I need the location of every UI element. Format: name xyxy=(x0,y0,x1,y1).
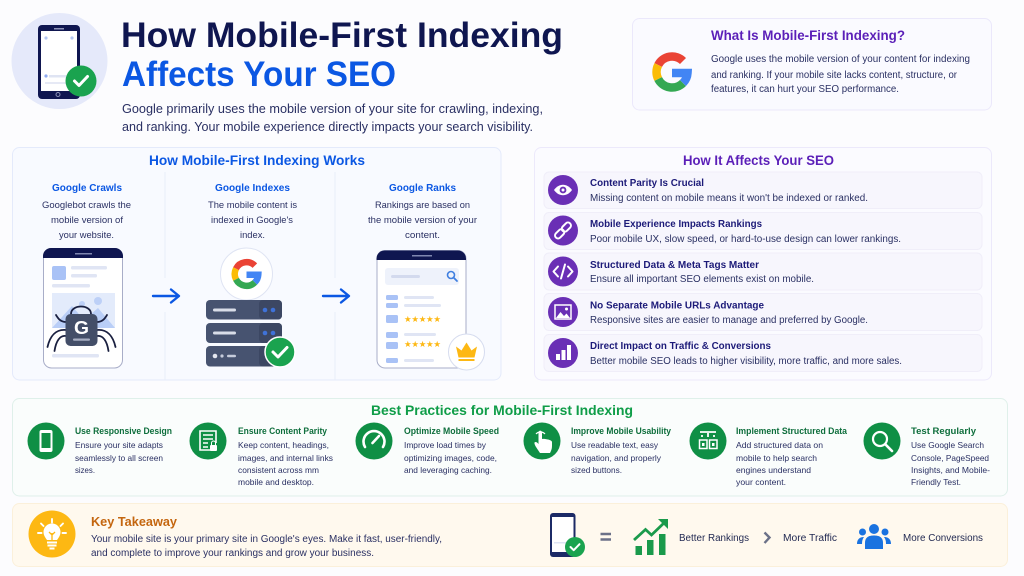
practice: test regularly: Console, PageSpeed xyxy=(911,453,989,463)
step: google crawls: your website. xyxy=(59,230,114,241)
icon: google G xyxy=(657,56,688,88)
label: more traffic: More Traffic xyxy=(783,533,837,544)
practice: responsive design: seamlessly to all screen xyxy=(75,453,163,463)
row: mobile experience xyxy=(544,212,982,250)
step: google indexes: index. xyxy=(240,230,265,241)
icon: image xyxy=(548,297,578,327)
description: features, it can hurt your SEO performance. xyxy=(711,84,899,95)
row: direct impact: Direct Impact on Traffic & Conversions xyxy=(590,341,771,352)
step: google crawls: Googlebot crawls the xyxy=(42,200,131,211)
illustration: phone with search rankings: ★★★★★ xyxy=(404,340,441,350)
chevron xyxy=(764,532,770,543)
panel: how it affects your seo xyxy=(534,148,992,380)
takeaway text: Your mobile site is your primary site in Google's eyes. Make it fast, user-friendly, xyxy=(91,534,442,545)
practice: mobile speed: optimizing images, code, xyxy=(404,453,497,463)
practice: content parity: consistent across mm xyxy=(238,465,319,475)
heading: How Mobile-First Indexing Works xyxy=(149,152,365,168)
step: google ranks: the mobile version of your xyxy=(368,215,477,226)
row: no separate urls: Responsive sites are easier to manage and preferred by Google. xyxy=(590,315,868,326)
icon: phone with check badge xyxy=(12,13,108,109)
row: no separate urls xyxy=(544,294,982,330)
practice: structured data: engines understand xyxy=(736,465,811,475)
icon: growth chart xyxy=(634,519,668,555)
practice: mobile speed xyxy=(356,422,499,475)
practice: mobile speed: and leveraging caching. xyxy=(404,465,492,475)
heading: Best Practices for Mobile-First Indexing xyxy=(371,402,633,418)
heading: How It Affects Your SEO xyxy=(683,152,834,168)
practice: mobile usability: Improve Mobile Usability xyxy=(571,426,671,436)
icon: link xyxy=(548,216,578,246)
icon: code xyxy=(548,256,578,286)
icon: eye xyxy=(548,175,578,205)
step: google crawls: mobile version of xyxy=(51,215,123,226)
step: google ranks: Google Ranks xyxy=(389,182,456,194)
takeaway text: and complete to improve your rankings and grow your business. xyxy=(91,548,374,559)
description: and ranking. If your mobile site lacks content, structure, or xyxy=(711,70,958,81)
step: google indexes xyxy=(206,182,297,367)
row: content parity xyxy=(544,172,982,208)
label: better rankings: Better Rankings xyxy=(679,533,749,544)
row: mobile experience: Mobile Experience Impacts Rankings xyxy=(590,219,762,230)
intro text xyxy=(122,102,543,134)
practice: content parity: Ensure Content Parity xyxy=(238,426,327,436)
practice: content parity xyxy=(190,422,333,487)
illustration: google server stack xyxy=(206,248,295,367)
step: google crawls: Google Crawls xyxy=(52,182,122,194)
practice: structured data: mobile to help search xyxy=(736,453,817,463)
practice: mobile usability: navigation, and properly xyxy=(571,453,662,463)
practice: test regularly xyxy=(864,422,990,487)
intro text: and ranking. Your mobile experience directly impacts your search visibility. xyxy=(122,120,533,134)
icon: phone xyxy=(28,422,64,460)
step: google indexes: The mobile content is xyxy=(208,200,297,211)
panel: best practices xyxy=(12,398,1008,496)
practice: responsive design xyxy=(28,422,172,475)
practice: test regularly: Friendly Test. xyxy=(911,477,961,487)
illustration: phone with crawler spider xyxy=(43,248,123,368)
row: structured data xyxy=(544,253,982,290)
row: mobile experience: Poor mobile UX, slow speed, or hard-to-use design can lower rankings. xyxy=(590,234,901,245)
description xyxy=(711,54,970,95)
step: google indexes: indexed in Google's xyxy=(211,215,293,226)
practice: structured data xyxy=(690,422,848,487)
practice: test regularly: Test Regularly xyxy=(911,426,976,436)
practice: structured data: Add structured data on xyxy=(736,440,823,450)
illustration: phone with search rankings: ★★★★★ xyxy=(404,315,441,325)
step: google indexes: Google Indexes xyxy=(215,182,290,194)
practice: mobile usability: sized buttons. xyxy=(571,465,622,475)
icon: bar chart xyxy=(548,338,578,368)
label: more conversions: More Conversions xyxy=(903,533,983,544)
title xyxy=(121,15,563,94)
practice: content parity: mobile and desktop. xyxy=(238,477,314,487)
icon: lightbulb xyxy=(28,510,76,558)
practice: mobile speed: Optimize Mobile Speed xyxy=(404,426,499,436)
step: google ranks xyxy=(368,182,484,370)
row: structured data: Structured Data & Meta Tags Matter xyxy=(590,260,759,271)
icon: structured blocks xyxy=(690,422,726,460)
row: content parity: Content Parity Is Crucial xyxy=(590,178,704,189)
row: content parity: Missing content on mobile means it won't be indexed or ranked. xyxy=(590,193,868,204)
panel: key takeaway xyxy=(12,504,1008,566)
practice: content parity: Keep content, headings, xyxy=(238,440,329,450)
takeaway text xyxy=(91,534,442,559)
heading: What Is Mobile-First Indexing? xyxy=(711,28,905,43)
step: google ranks: content. xyxy=(405,230,440,241)
icon: magnifier xyxy=(864,422,900,460)
icon: speed gauge xyxy=(356,422,392,460)
arrow: index to rank xyxy=(323,290,349,302)
practice: mobile usability: Use readable text, easy xyxy=(571,440,659,450)
intro text: Google primarily uses the mobile version of your site for crawling, indexing, xyxy=(122,102,543,116)
icon: content page xyxy=(190,422,226,460)
illustration: phone with crawler spider: G xyxy=(74,318,89,338)
panel: how mobile-first indexing works xyxy=(12,148,501,380)
icon: people xyxy=(857,524,891,549)
practice: responsive design: Use Responsive Design xyxy=(75,426,172,436)
icon: tapping hand xyxy=(524,422,560,460)
title: Affects Your SEO xyxy=(122,54,396,94)
equals sign xyxy=(600,534,611,540)
heading: Key Takeaway xyxy=(91,515,177,529)
practice: responsive design: sizes. xyxy=(75,465,95,475)
row: direct impact xyxy=(544,334,982,372)
step: google crawls xyxy=(42,182,131,368)
row: no separate urls: No Separate Mobile URLs Advantage xyxy=(590,300,764,312)
row: direct impact: Better mobile SEO leads to higher visibility, more traffic, and more sales. xyxy=(590,356,902,367)
practice: structured data: Implement Structured Data xyxy=(736,426,848,436)
arrow: crawl to index xyxy=(153,290,179,302)
practice: content parity: images, and internal links xyxy=(238,453,333,463)
practice: mobile speed: Improve load times by xyxy=(404,440,487,450)
icon: phone with check xyxy=(550,513,585,557)
description: Google uses the mobile version of your content for indexing xyxy=(711,54,970,65)
title: How Mobile-First Indexing xyxy=(121,15,563,55)
practice: test regularly: Use Google Search xyxy=(911,440,984,450)
step: google ranks: Rankings are based on xyxy=(375,200,470,211)
practice: mobile usability xyxy=(524,422,671,475)
illustration: phone with search rankings xyxy=(376,250,484,370)
row: structured data: Ensure all important SEO elements exist on mobile. xyxy=(590,274,814,285)
practice: structured data: your content. xyxy=(736,477,786,487)
practice: responsive design: Ensure your site adapts xyxy=(75,440,163,450)
panel: what is mobile-first indexing xyxy=(632,18,992,110)
practice: test regularly: Insights, and Mobile- xyxy=(911,465,990,475)
